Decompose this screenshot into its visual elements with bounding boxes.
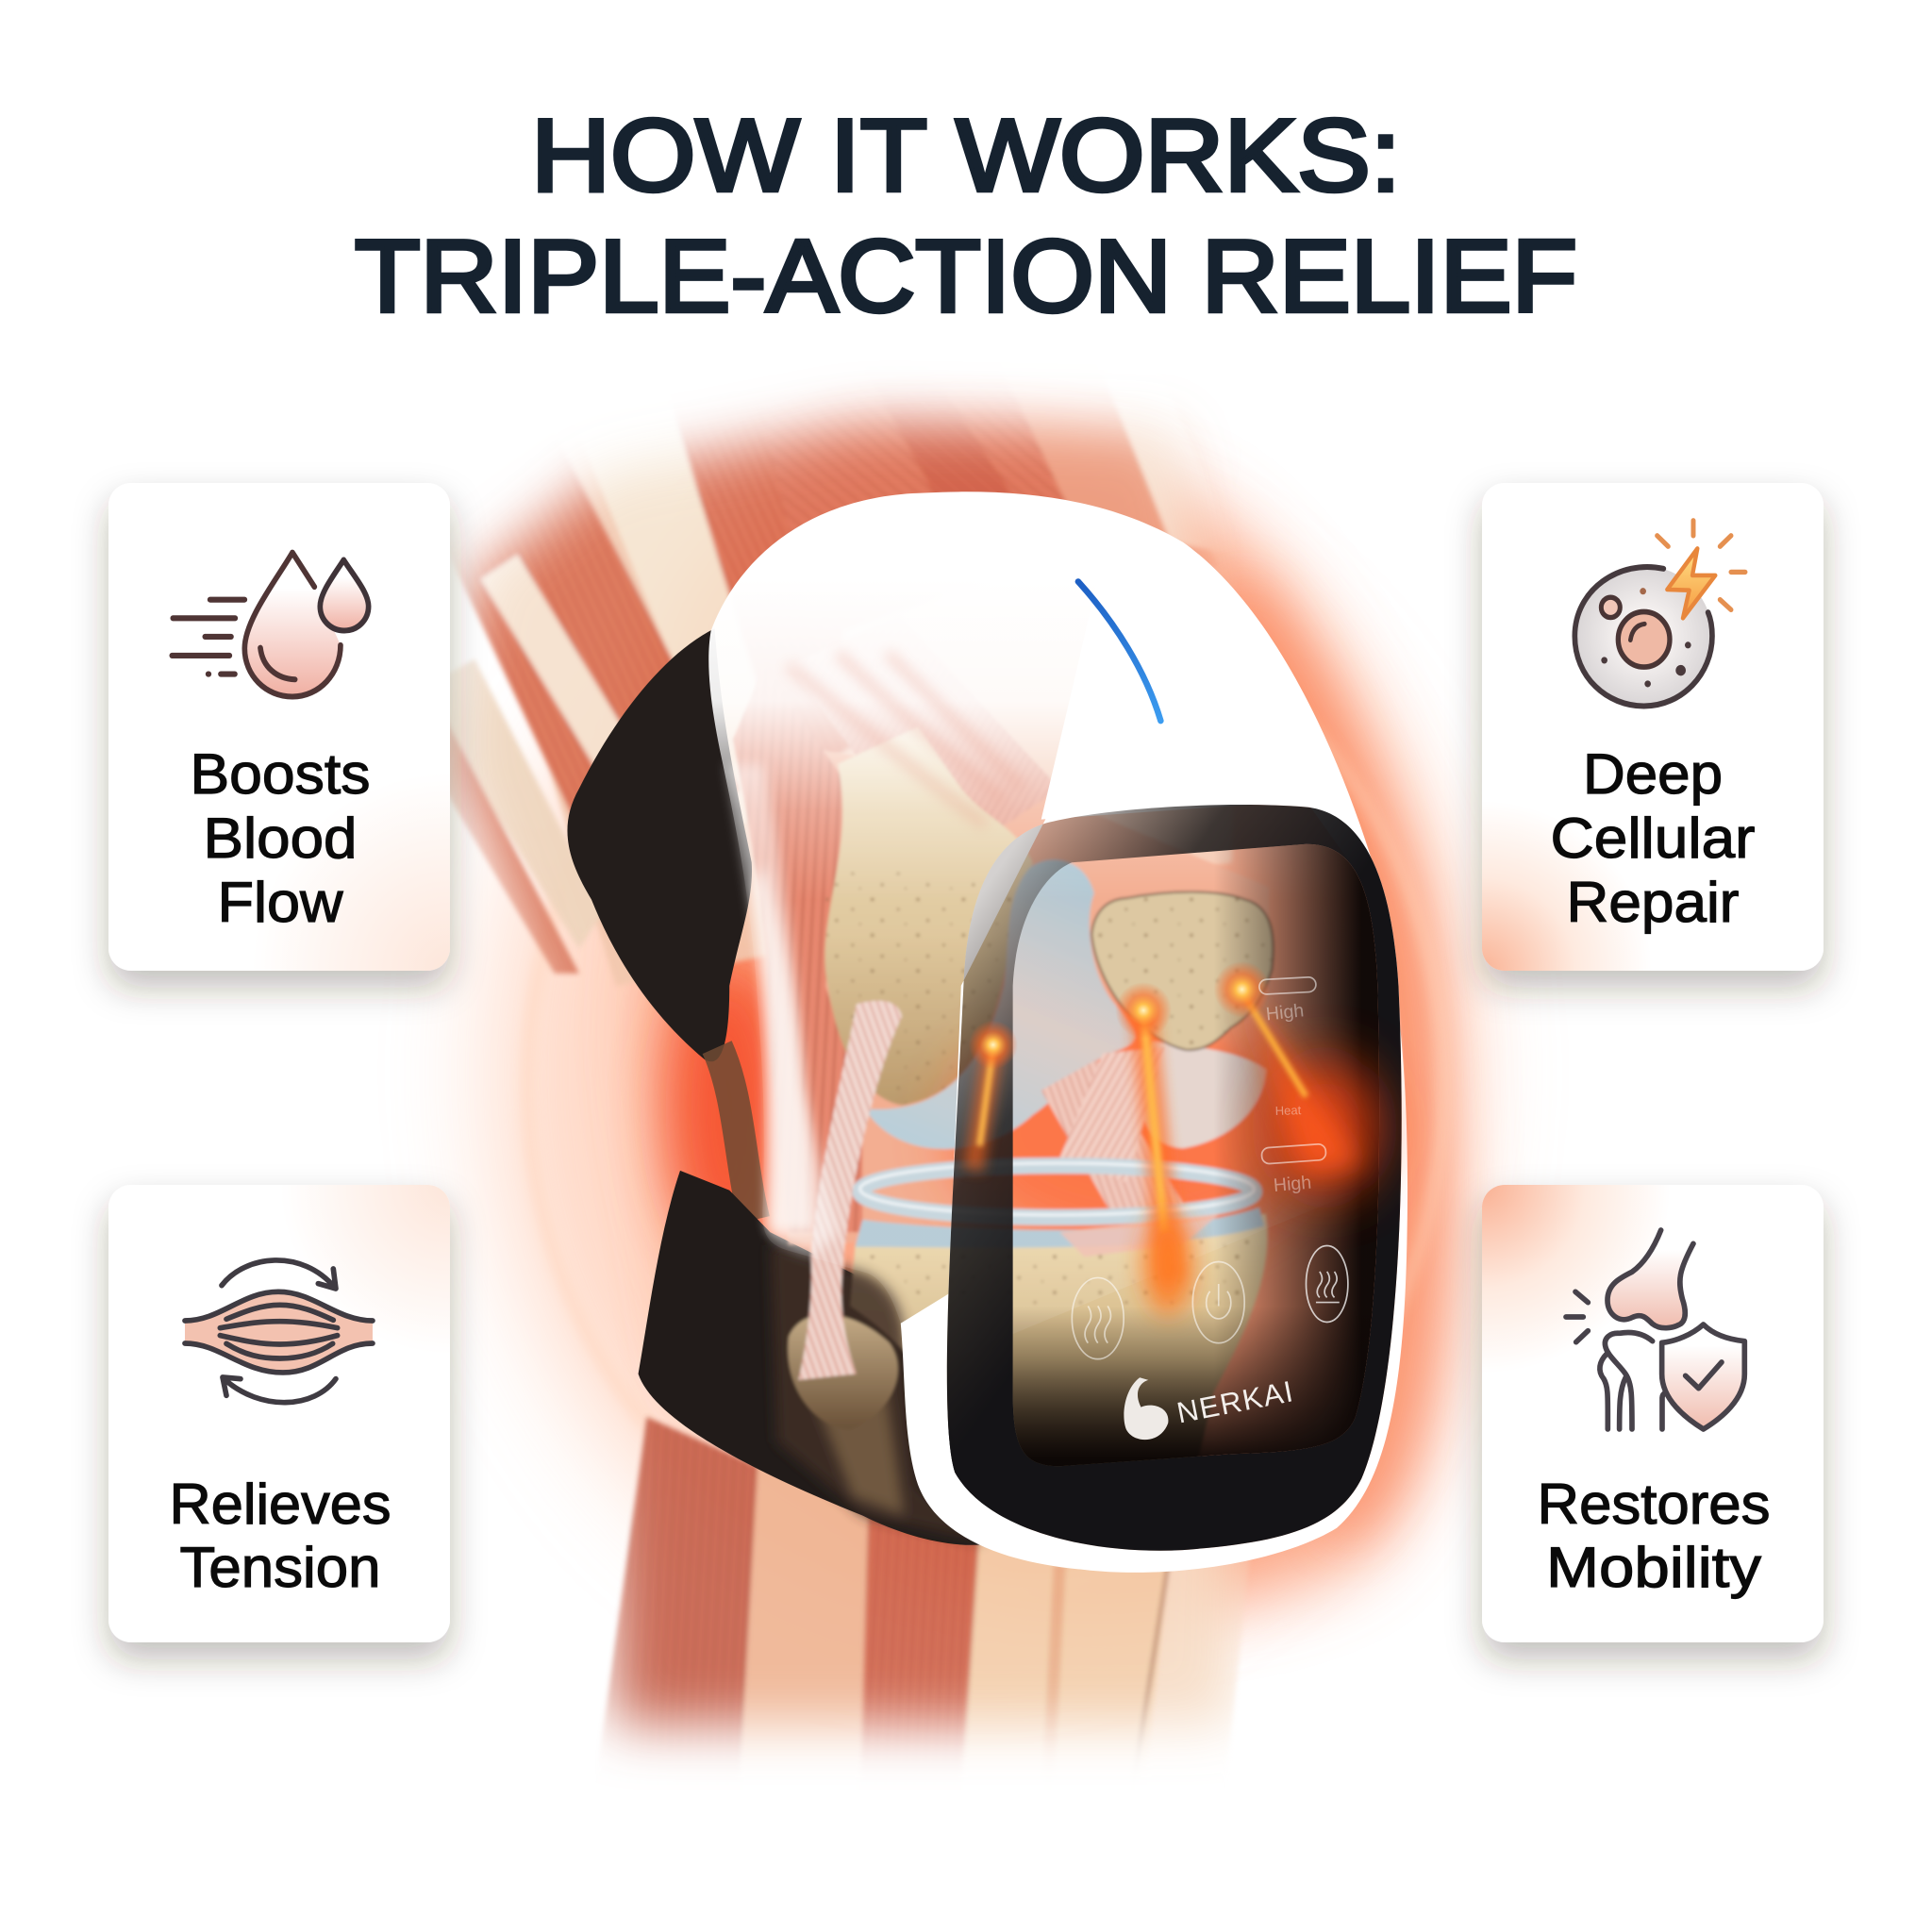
strap: knee pit connector xyxy=(717,1047,754,1220)
meniscal ligament fibres xyxy=(1059,1214,1220,1257)
peach base behind joint xyxy=(764,740,1269,1244)
icon: cell with lightning bolt xyxy=(1574,521,1745,706)
screen labels: High xyxy=(1265,1000,1305,1024)
patellar tendon xyxy=(798,1001,902,1380)
card: restores mobility xyxy=(1482,1185,1824,1642)
icon: relaxed muscle xyxy=(185,1260,373,1403)
screen controls xyxy=(1072,976,1348,1359)
screen labels: Heat xyxy=(1274,1103,1302,1118)
label: Boosts xyxy=(191,742,370,806)
cartilage xyxy=(865,859,1136,1149)
white tendon band xyxy=(754,862,816,1232)
label: Mobility xyxy=(1546,1536,1761,1599)
brand logo xyxy=(1124,1374,1295,1440)
quadriceps streaks through shell xyxy=(789,653,1023,825)
label xyxy=(1538,1473,1770,1599)
device shell xyxy=(708,491,1407,1356)
shaded region beneath shell edge xyxy=(770,1244,986,1542)
central illustration: knee device over anatomy xyxy=(443,381,1517,1768)
shell opaque upper right xyxy=(1041,530,1380,887)
title: TRIPLE-ACTION RELIEF xyxy=(355,219,1577,334)
deep orange heat behind joint xyxy=(949,1010,1319,1257)
blue indicator light xyxy=(1078,581,1160,721)
label: Tension xyxy=(179,1536,381,1599)
meniscus xyxy=(855,1208,1264,1248)
femur xyxy=(824,727,1033,1106)
screen labels: High xyxy=(1273,1173,1312,1196)
label: Relieves xyxy=(170,1473,391,1536)
brand logo: NERKAI xyxy=(1174,1374,1295,1429)
icon: blood drops xyxy=(172,553,369,696)
shell translucent edge xyxy=(727,764,838,1257)
patella xyxy=(1091,891,1273,1050)
heat slider xyxy=(1258,976,1316,994)
right heat button xyxy=(1306,1245,1348,1322)
label xyxy=(170,1473,391,1599)
heat glow xyxy=(499,491,1448,1626)
card: relieves tension xyxy=(108,1185,450,1642)
shell bezel xyxy=(947,805,1402,1551)
card: deep cellular repair xyxy=(1482,483,1824,971)
strap: upper xyxy=(567,628,752,1061)
label: Blood xyxy=(204,807,357,870)
label xyxy=(191,742,370,934)
cruciate ligament A xyxy=(1041,1059,1189,1220)
left heat button xyxy=(1072,1277,1124,1359)
touch screen xyxy=(1013,844,1379,1466)
fibula head xyxy=(788,1314,898,1429)
tibia xyxy=(850,1214,1267,1528)
thigh and shin muscles xyxy=(450,383,1249,1768)
fibula shaft xyxy=(808,1380,905,1516)
strap: lower xyxy=(639,1171,998,1545)
icon: joint with shield xyxy=(1566,1230,1744,1429)
cruciate ligament B xyxy=(1059,1047,1164,1183)
screen labels xyxy=(1265,1000,1312,1196)
quadriceps tendon xyxy=(789,616,1059,838)
title: HOW IT WORKS: xyxy=(531,98,1401,213)
title xyxy=(355,98,1577,334)
femoral condyle xyxy=(1141,1041,1267,1148)
label xyxy=(1551,742,1755,934)
knee anatomy xyxy=(733,616,1319,1542)
label: Restores xyxy=(1538,1473,1770,1536)
label: Cellular xyxy=(1551,807,1755,870)
power button xyxy=(1192,1261,1244,1343)
card: boosts blood flow xyxy=(108,483,450,971)
label: Flow xyxy=(217,871,343,934)
shell lower rim xyxy=(901,789,1407,1573)
label: Repair xyxy=(1566,871,1740,934)
high slider xyxy=(1261,1143,1326,1164)
thigh muscle behind femur xyxy=(733,665,862,1232)
light beams xyxy=(969,961,1380,1315)
label: Deep xyxy=(1583,742,1723,806)
